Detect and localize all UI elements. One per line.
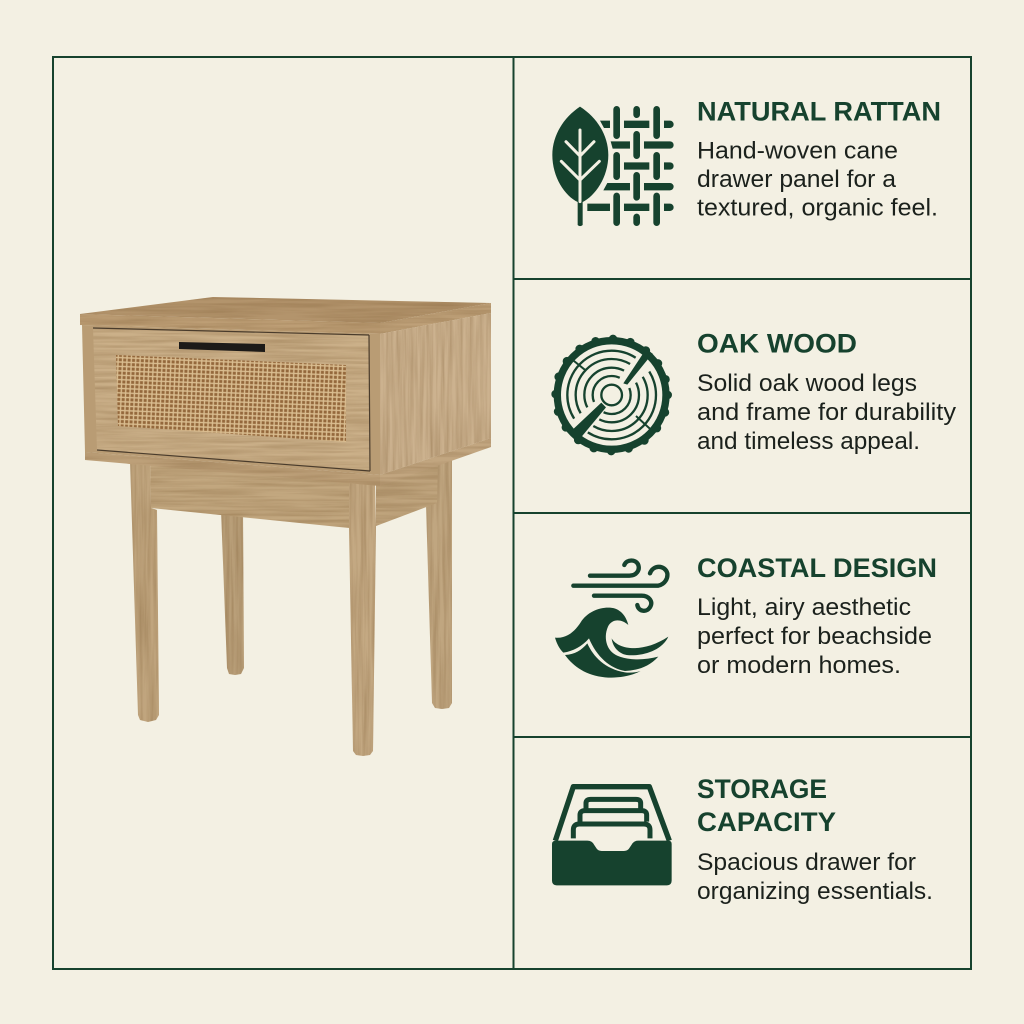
description: or modern homes. [697, 652, 901, 679]
description: and timeless appeal. [697, 428, 920, 455]
description: textured, organic feel. [697, 194, 938, 222]
table top surface [80, 297, 491, 323]
icon: tree rings [556, 339, 668, 451]
top edge side [380, 303, 491, 334]
back right leg [426, 460, 452, 709]
description: organizing essentials. [697, 878, 933, 905]
side panel [380, 313, 491, 475]
description: Solid oak wood legs [697, 370, 917, 397]
carcass front [82, 325, 380, 475]
description: and frame for durability [697, 399, 956, 426]
description: Light, airy aesthetic [697, 594, 911, 621]
description: perfect for beachside [697, 623, 932, 650]
panel: natural rattan [552, 96, 941, 226]
description: Hand-woven cane [697, 138, 898, 164]
bottom edge front [85, 452, 380, 486]
panel: storage capacity [552, 774, 933, 905]
apron side [376, 462, 438, 526]
bottom edge side [380, 438, 491, 486]
panel: coastal design [555, 553, 937, 679]
rattan panel [116, 355, 346, 442]
icon: drawer tray [552, 787, 672, 885]
apron front [150, 460, 349, 528]
layout frame [53, 57, 971, 969]
heading: CAPACITY [697, 807, 836, 837]
front left leg [130, 460, 159, 722]
drawer shadow lines [93, 328, 370, 471]
heading: OAK WOOD [697, 328, 857, 358]
heading: NATURAL RATTAN [697, 96, 941, 126]
icon: leaf and weave [552, 107, 674, 226]
front right leg [349, 480, 376, 756]
panel: product photo of nightstand [80, 297, 491, 756]
drawer handle [179, 342, 265, 352]
heading: COASTAL DESIGN [697, 553, 937, 583]
drawer front [93, 328, 370, 471]
top edge front [80, 314, 380, 334]
description: drawer panel for a [697, 166, 897, 193]
panel: oak wood [556, 328, 956, 455]
back middle leg [221, 510, 244, 675]
icon: wave and wind [555, 560, 668, 678]
heading: STORAGE [697, 774, 827, 804]
description: Spacious drawer for [697, 849, 916, 876]
